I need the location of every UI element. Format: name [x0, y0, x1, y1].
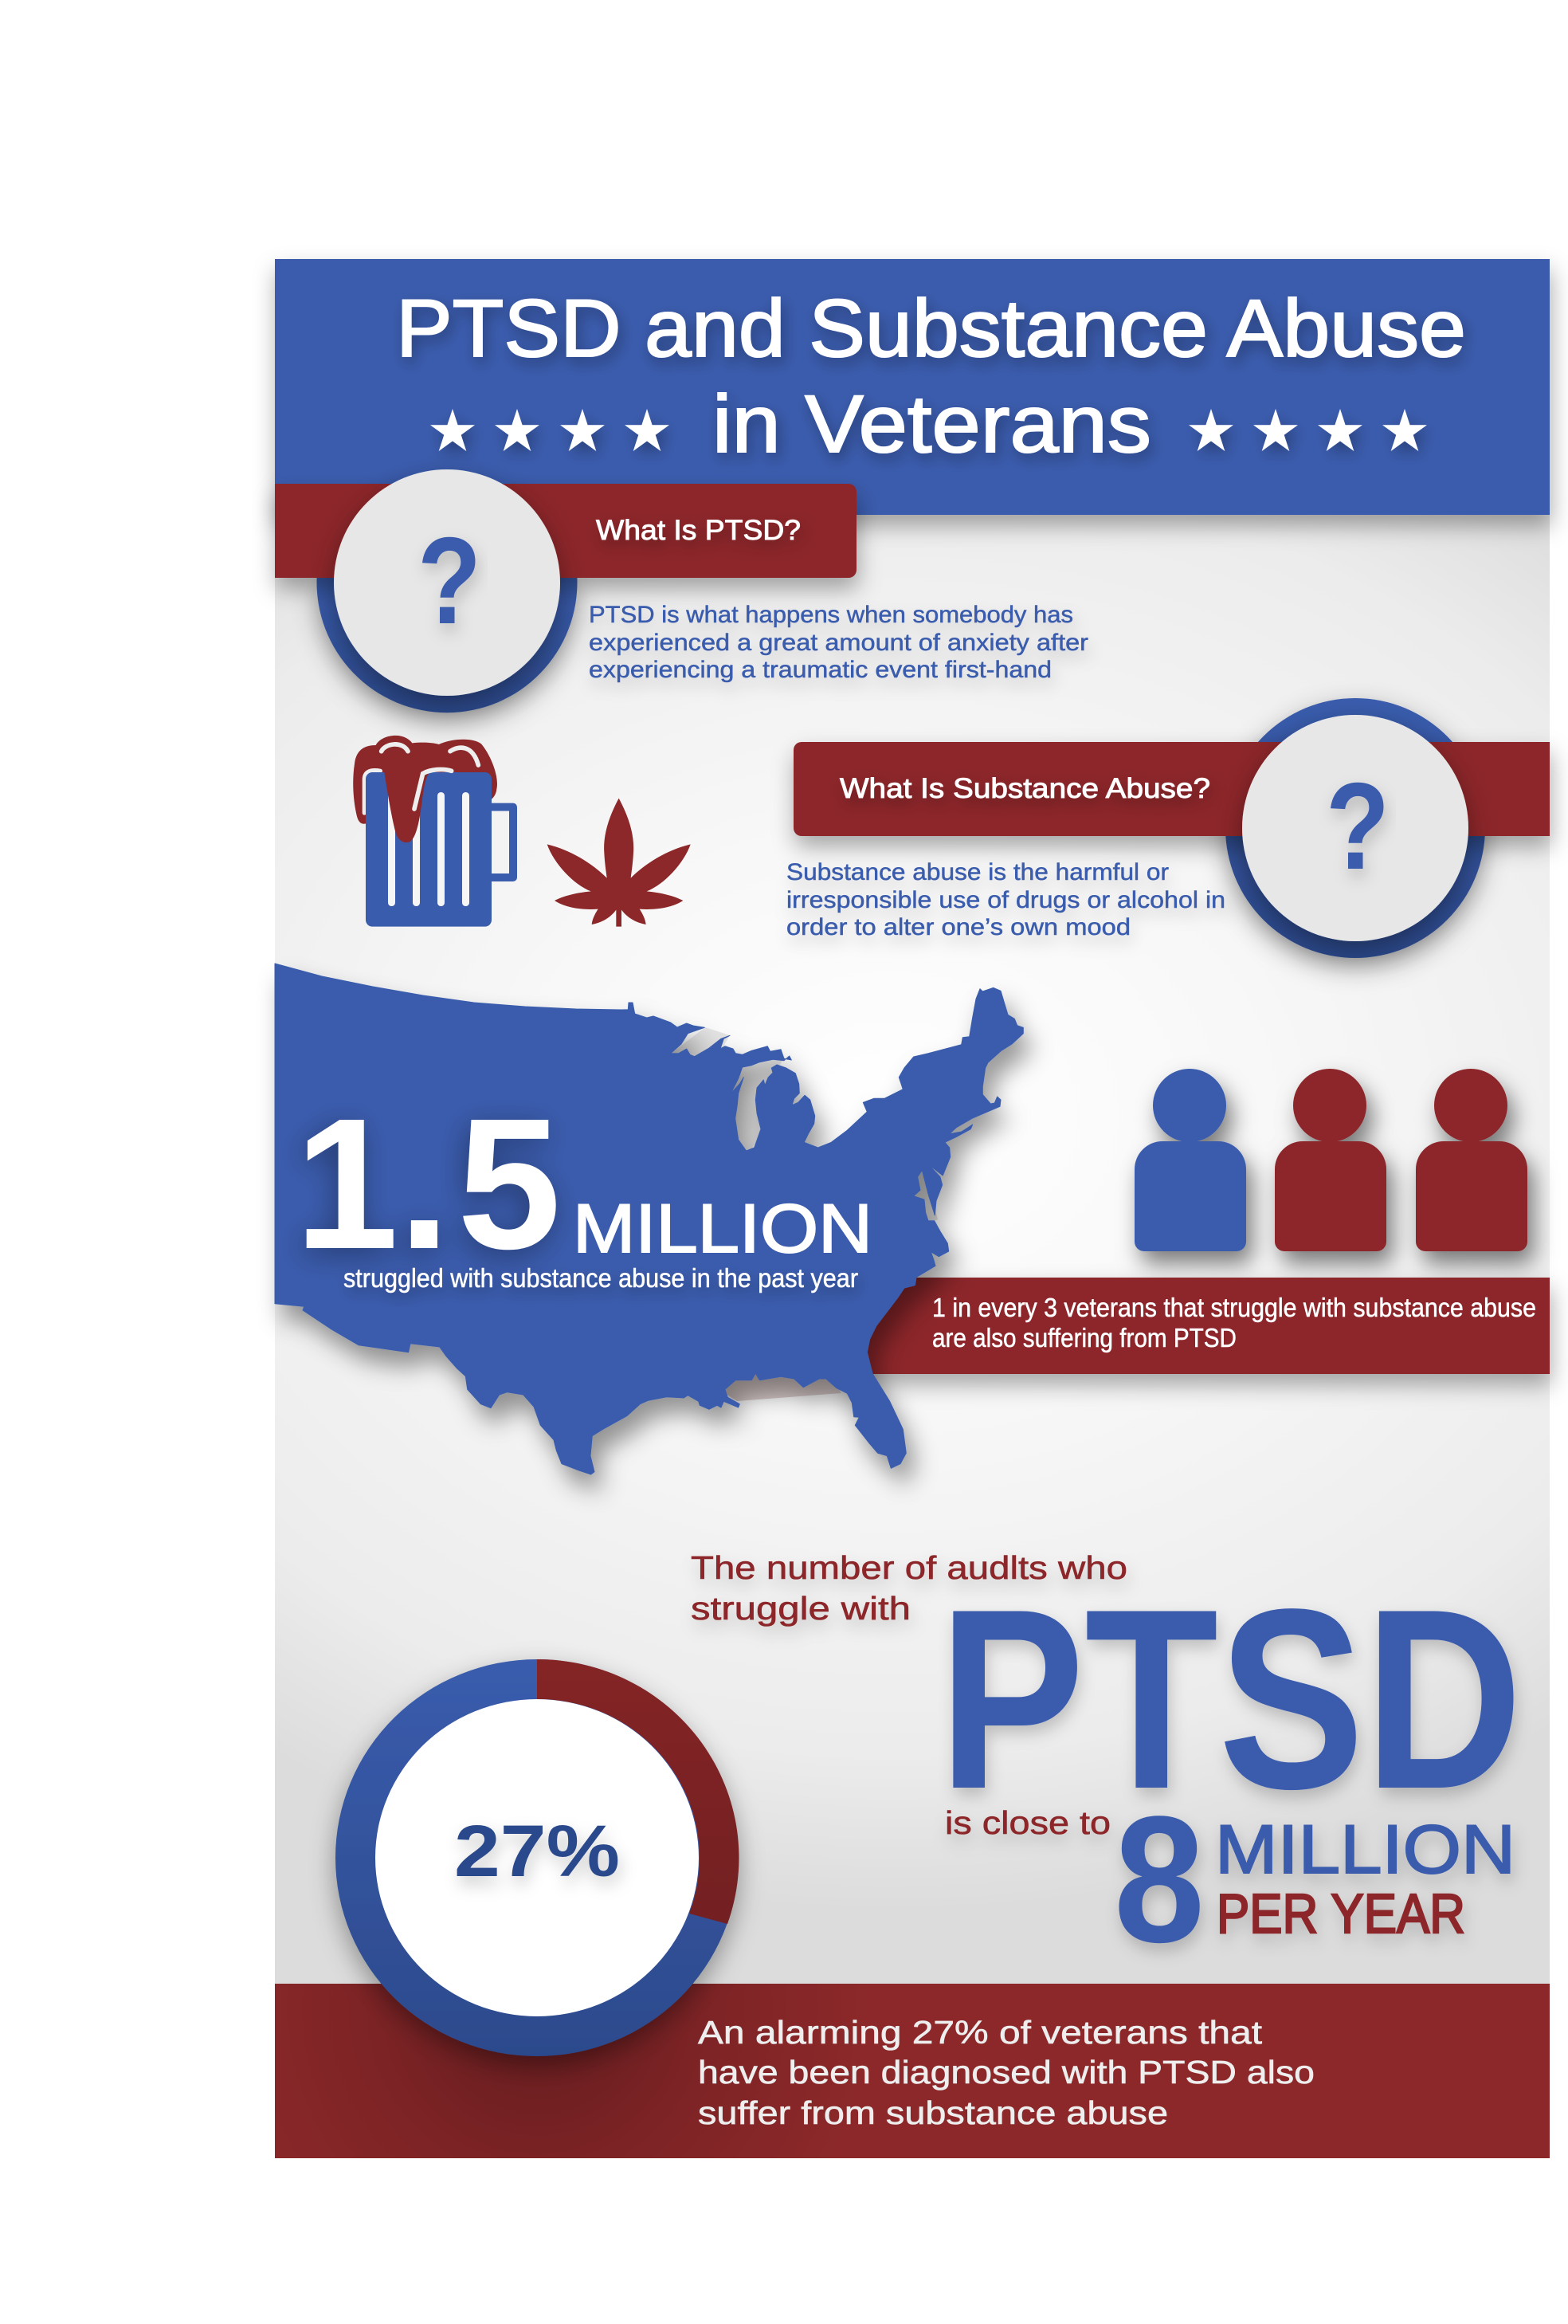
title	[396, 283, 1466, 469]
map: contiguous United States	[275, 964, 1023, 1474]
number: 8: 8	[1114, 1778, 1205, 1980]
title: PTSD and Substance Abuse	[396, 283, 1466, 374]
statistic: 8 million per year	[1114, 1778, 1515, 1980]
text block: alarming 27 percent: suffer from substance abuse	[698, 2094, 1168, 2131]
person: blue	[1135, 1069, 1246, 1251]
icon: left stars	[430, 409, 669, 451]
label: per year: PER YEAR	[1217, 1882, 1465, 1945]
heading: what is PTSD: What Is PTSD?	[596, 515, 801, 546]
person: red	[1275, 1069, 1386, 1251]
text block: substance abuse definition: Substance abuse is the harmful or	[786, 859, 1169, 885]
heading bar	[275, 484, 857, 578]
circle badge	[1242, 715, 1468, 941]
label: million: MILLION	[1215, 1812, 1515, 1888]
panel: what is PTSD	[275, 469, 857, 713]
donut chart: 27 percent	[335, 1659, 739, 2056]
text block: alarming 27 percent: An alarming 27% of veterans that	[698, 2014, 1263, 2051]
text block: PTSD definition: experienced a great amount of anxiety after	[589, 630, 1088, 656]
icon: cannabis leaf	[547, 799, 691, 927]
heading: what is substance abuse: What Is Substance Abuse?	[840, 773, 1210, 804]
icon: beer mug	[353, 736, 517, 927]
label: million: MILLION	[573, 1191, 872, 1267]
caption: past year: struggled with substance abuse in the past year	[343, 1263, 858, 1293]
icon: question mark: ?	[1326, 757, 1390, 895]
heading bar	[794, 742, 1550, 836]
text block: PTSD definition: experiencing a traumatic event first-hand	[589, 657, 1052, 683]
donut centre	[375, 1699, 699, 2016]
callout text: 1 in every 3: are also suffering from PTSD	[932, 1323, 1237, 1352]
panel: page background	[275, 259, 1550, 2158]
text block: substance abuse definition: order to alter one’s own mood	[786, 914, 1131, 940]
ring: blue circle	[1225, 698, 1485, 958]
text block: number of adults: struggle with	[691, 1590, 911, 1627]
callout text: 1 in every 3	[932, 1293, 1536, 1352]
text block: number of adults	[691, 1549, 1127, 1627]
icon: three people	[1135, 1069, 1527, 1251]
text: is close to: is close to	[945, 1804, 1111, 1841]
text block: substance abuse definition: irresponsible use of drugs or alcohol in	[786, 887, 1225, 913]
donut slice: red	[537, 1659, 739, 1924]
text block: alarming 27 percent	[698, 2014, 1315, 2131]
statistic: 1.5 million	[295, 1079, 872, 1293]
text block: alarming 27 percent: have been diagnosed with PTSD also	[698, 2054, 1315, 2090]
text block: PTSD definition: PTSD is what happens when somebody has	[589, 602, 1073, 628]
text block: PTSD definition	[589, 602, 1088, 683]
text block: number of adults: The number of audlts who	[691, 1549, 1127, 1586]
ring: lower blue arc	[317, 578, 577, 713]
donut base: blue	[335, 1659, 739, 2056]
number: 1.5: 1.5	[295, 1079, 561, 1288]
icon: right stars	[1189, 409, 1427, 451]
title: in Veterans	[712, 379, 1151, 469]
person: red	[1416, 1069, 1527, 1251]
circle badge	[334, 469, 560, 696]
icon: question mark: ?	[417, 512, 481, 650]
callout band: 1 in every 3	[845, 1278, 1550, 1374]
panel: header banner	[275, 259, 1550, 515]
panel: bottom band	[275, 1984, 1550, 2158]
value: 27%: 27%	[454, 1811, 620, 1892]
panel: what is substance abuse	[794, 698, 1550, 958]
text block: substance abuse definition	[786, 859, 1225, 940]
